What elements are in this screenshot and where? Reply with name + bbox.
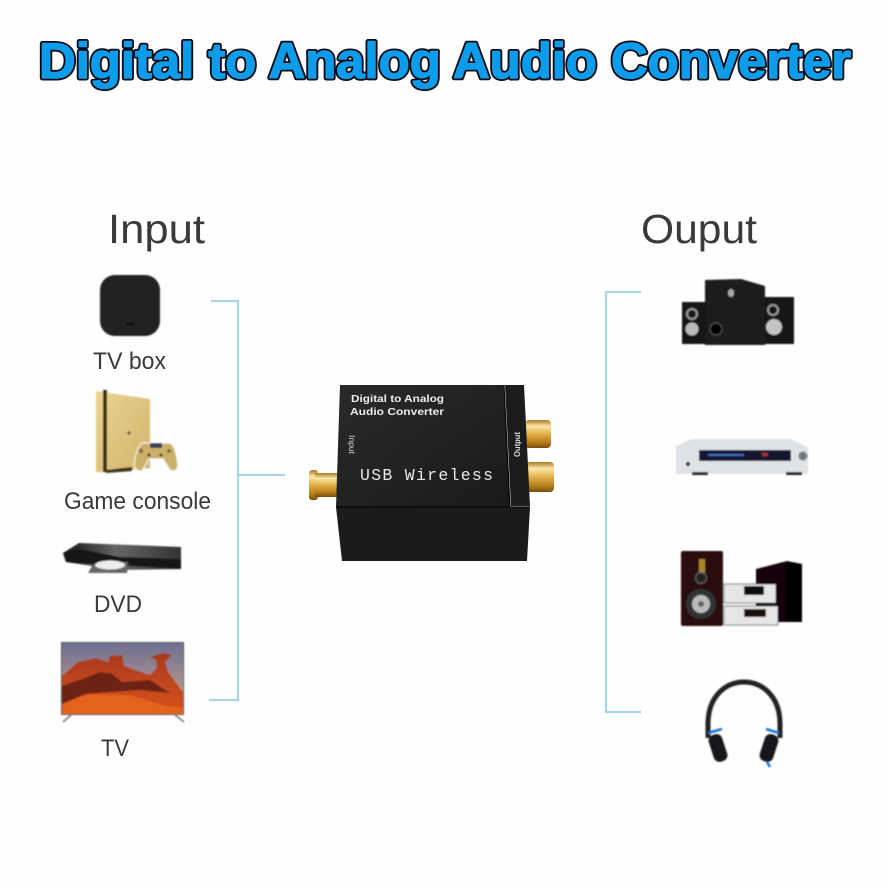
product: converter device <box>309 385 554 561</box>
device front face <box>336 507 530 561</box>
device text: Input: Input <box>347 435 356 455</box>
input RCA connector <box>309 470 338 500</box>
icon: game controller <box>134 443 178 471</box>
label: TV box: TV box <box>93 348 166 375</box>
icon: game console <box>96 390 178 473</box>
heading: input: Input <box>108 206 206 252</box>
device label: Digital to Analog <box>351 394 444 405</box>
label: TV: TV <box>101 735 129 762</box>
device label <box>350 394 444 418</box>
title: Digital to Analog Audio Converter <box>39 33 851 89</box>
device text: Output: Output <box>513 432 522 457</box>
device text: USB Wireless: USB Wireless <box>360 466 493 485</box>
output bracket connector <box>606 292 641 712</box>
label: DVD: DVD <box>94 591 142 618</box>
icon: TV box <box>100 275 160 336</box>
heading: output: Ouput <box>641 206 758 252</box>
device top face <box>336 385 510 507</box>
device label: Audio Converter <box>350 407 444 418</box>
output RCA connector bottom <box>526 462 554 492</box>
title: Digital to Analog Audio Converter <box>39 33 851 89</box>
icon: speakers <box>682 279 794 345</box>
icon: TV <box>61 642 184 722</box>
label: game console: Game console <box>64 488 211 515</box>
icon: AV receiver <box>676 439 808 475</box>
input bracket connector <box>209 301 285 700</box>
device output panel <box>505 385 530 506</box>
icon: hi-fi system <box>681 551 802 626</box>
icon: DVD player <box>63 543 181 573</box>
icon: headphones <box>707 682 780 767</box>
output RCA connector top <box>525 420 551 448</box>
